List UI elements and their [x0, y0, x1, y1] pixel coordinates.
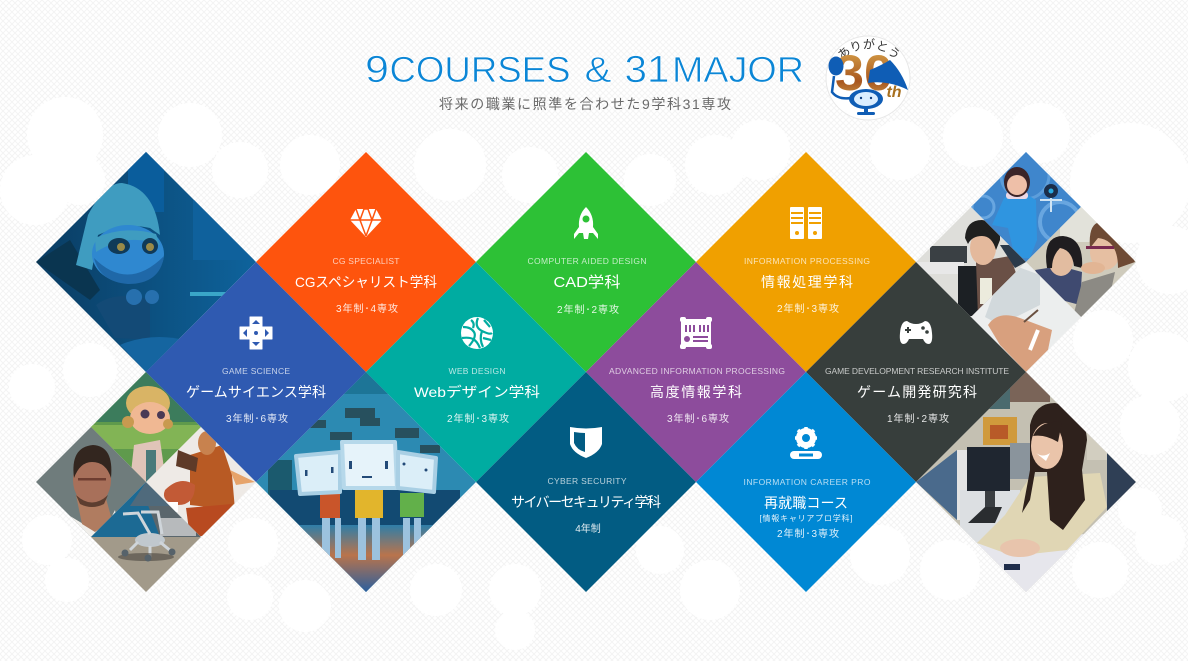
30th anniversary badge: ありがとう: [838, 38, 899, 57]
panel: information processing: [696, 152, 916, 372]
icon: rocket: [574, 207, 598, 239]
panel: information processing: 2年制･3専攻: [777, 302, 839, 315]
panel: information career pro: [696, 372, 916, 592]
panel: web design: WEB DESIGN: [448, 366, 506, 376]
panel: CAD: CAD学科: [554, 274, 620, 291]
title: &: [584, 49, 612, 90]
panel: CG specialist: CGスペシャリスト学科: [295, 274, 437, 290]
panel: CG specialist: [256, 152, 476, 372]
photo: two students: [1026, 207, 1136, 317]
title: MAJOR: [672, 49, 804, 90]
panel: game development research institute: 1年制･2専攻: [887, 412, 949, 425]
panel: game science: ゲームサイエンス学科: [186, 384, 326, 400]
panel: web design: Webデザイン学科: [414, 384, 540, 400]
photo: three monitor robots: [256, 372, 476, 592]
title: COURSES: [390, 49, 570, 90]
panel: game science: [146, 262, 366, 482]
title: 9: [365, 49, 389, 91]
panel: game development research institute: ゲーム開発研究科: [857, 384, 977, 400]
photo: CG man portrait: [36, 427, 146, 537]
panel: cyber security: 4年制: [575, 522, 601, 535]
panel: web design: [366, 262, 586, 482]
panel: information career pro: INFORMATION CAREER PRO: [744, 477, 871, 487]
photo: CG girl in forest: [91, 372, 201, 482]
icon: game controller: [900, 321, 932, 344]
photo: CG robot vehicle: [91, 482, 201, 592]
panel: game development research institute: [806, 262, 1026, 482]
panel: information career pro: 再就職コース: [764, 495, 848, 511]
icon: shield: [570, 427, 602, 458]
panel: CAD: 2年制･2専攻: [557, 303, 619, 316]
panel: information career pro: [情報キャリアプロ学科]: [760, 513, 852, 523]
title: [365, 49, 804, 91]
title: 31: [624, 49, 670, 91]
panel: game science: GAME SCIENCE: [222, 366, 290, 376]
panel: game science: 3年制･6専攻: [226, 412, 288, 425]
panel: CAD: [476, 152, 696, 372]
subtitle: 将来の職業に照準を合わせた9学科31専攻: [439, 96, 731, 112]
photo: blue-haired CG girl: [36, 152, 263, 372]
panel: cyber security: サイバーセキュリティ学科: [511, 494, 661, 510]
photo: student at computer: [916, 207, 1026, 317]
icon: globe: [461, 317, 493, 349]
photo: blue CG character: [971, 151, 1081, 262]
panel: information processing: 情報処理学科: [761, 274, 853, 290]
panel: information career pro: 2年制･3専攻: [777, 527, 839, 540]
panel: CG specialist: 3年制･4専攻: [336, 302, 398, 315]
icon: gear on conveyor: [790, 427, 822, 459]
panel: CG specialist: CG SPECIALIST: [332, 256, 400, 266]
panel: cyber security: [476, 372, 696, 592]
icon: d-pad: [240, 317, 272, 349]
icon: server towers: [790, 207, 822, 239]
30th anniversary badge: th: [886, 84, 902, 101]
panel: CAD: COMPUTER AIDED DESIGN: [528, 256, 646, 266]
photo: smiling woman at computer: [916, 372, 1136, 592]
panel: advanced information processing: ADVANCED INFORMATION PROCESSING: [609, 366, 785, 376]
icon: diamond gem: [350, 209, 382, 237]
panel: game development research institute: GAME DEVELOPMENT RESEARCH INSTITUTE: [825, 366, 1009, 376]
panel: advanced information processing: [586, 262, 806, 482]
panel: information processing: INFORMATION PROCESSING: [744, 256, 870, 266]
panel: advanced information processing: 高度情報学科: [650, 384, 742, 400]
panel: cyber security: CYBER SECURITY: [548, 476, 627, 486]
30th anniversary badge: 30: [835, 45, 893, 101]
photo: CG warrior: [146, 427, 256, 537]
panel: advanced information processing: 3年制･6専攻: [667, 412, 729, 425]
icon: circuit board: [680, 317, 712, 349]
photo: hand sketching: [971, 262, 1081, 372]
panel: web design: 2年制･3専攻: [447, 412, 509, 425]
30th anniversary badge: [826, 36, 910, 120]
